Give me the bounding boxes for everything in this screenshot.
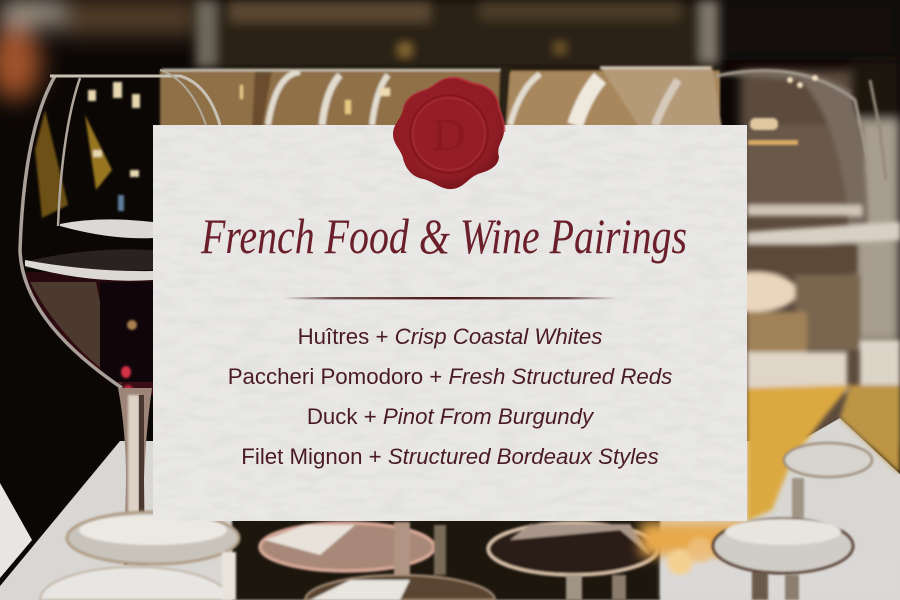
divider rule [283, 297, 617, 299]
wine fill [24, 272, 153, 395]
pairing line 1: Huîtres + Crisp Coastal Whites [298, 324, 602, 349]
blurred background bokeh [0, 0, 900, 100]
wax seal: D [432, 109, 466, 160]
wax seal [393, 78, 504, 189]
stem [118, 388, 152, 565]
glass foot bases [40, 512, 658, 600]
paper card [153, 125, 747, 521]
large rear glass at top [195, 0, 720, 70]
row of upper glass bowls [160, 66, 722, 128]
paper texture [196, 128, 676, 510]
left glass with red wine [20, 70, 220, 565]
bokeh lights and right table foot [640, 522, 750, 556]
bar table surface [0, 418, 900, 600]
amber wine and right-side glasses [713, 70, 900, 521]
pairing line 4: Filet Mignon + Structured Bordeaux Styles [241, 444, 659, 469]
dark reflective section of the bar [232, 518, 660, 600]
glass gold reflections [35, 82, 140, 395]
wine surface highlight [24, 249, 153, 271]
title: French Food & Wine Pairings [200, 208, 687, 264]
glass outlines [20, 76, 122, 388]
right background base [740, 60, 900, 445]
pairing line 2: Paccheri Pomodoro + Fresh Structured Reds [228, 364, 672, 389]
pairing line 3: Duck + Pinot From Burgundy [307, 404, 593, 429]
